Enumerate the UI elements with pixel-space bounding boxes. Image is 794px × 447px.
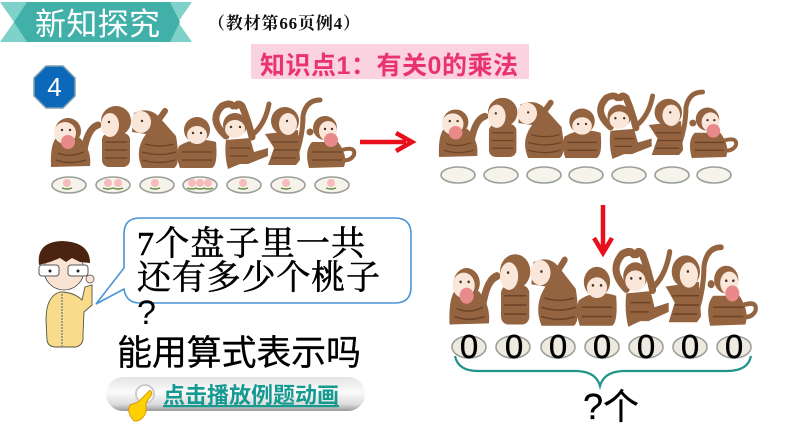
example number badge: 4 [47,72,62,102]
plates with zeros: 0 [725,328,743,365]
plates with zeros [452,328,751,365]
arrow: down [594,205,612,253]
brace [455,356,751,386]
speech bubble [96,218,411,332]
button: play animation [106,377,365,421]
monkeys with peaches [51,100,354,169]
empty plates [441,167,731,183]
speech bubble: 还有多少个桃子 [137,259,380,297]
icon: pointing hand [129,390,152,421]
speech bubble: ? [137,294,156,332]
speech bubble: 7个盘子里一共 [137,225,365,263]
plates with zeros: 0 [681,328,699,365]
plates with zeros: 0 [637,328,655,365]
example number badge [34,66,75,108]
banner: 新知探究: 新知探究 [35,7,160,42]
answer label: ?个 [583,386,639,427]
plates with zeros: 0 [593,328,611,365]
plates with peaches [52,177,349,193]
monkeys, second row [439,92,736,159]
button: play animation: 点击播放例题动画 [163,383,339,408]
knowledge point heading: 知识点1：有关0的乘法 [260,52,518,80]
plates with zeros: 0 [460,328,478,365]
monkeys, third row [449,247,756,327]
textbook reference: （教材第66页例4） [208,13,360,33]
icon: boy with glasses [39,241,94,347]
plates with zeros: 0 [505,328,523,365]
arrow: right [360,133,412,151]
banner: 新知探究 [0,2,192,42]
plates with zeros: 0 [549,328,567,365]
question text: 能用算式表示吗 [117,334,361,373]
